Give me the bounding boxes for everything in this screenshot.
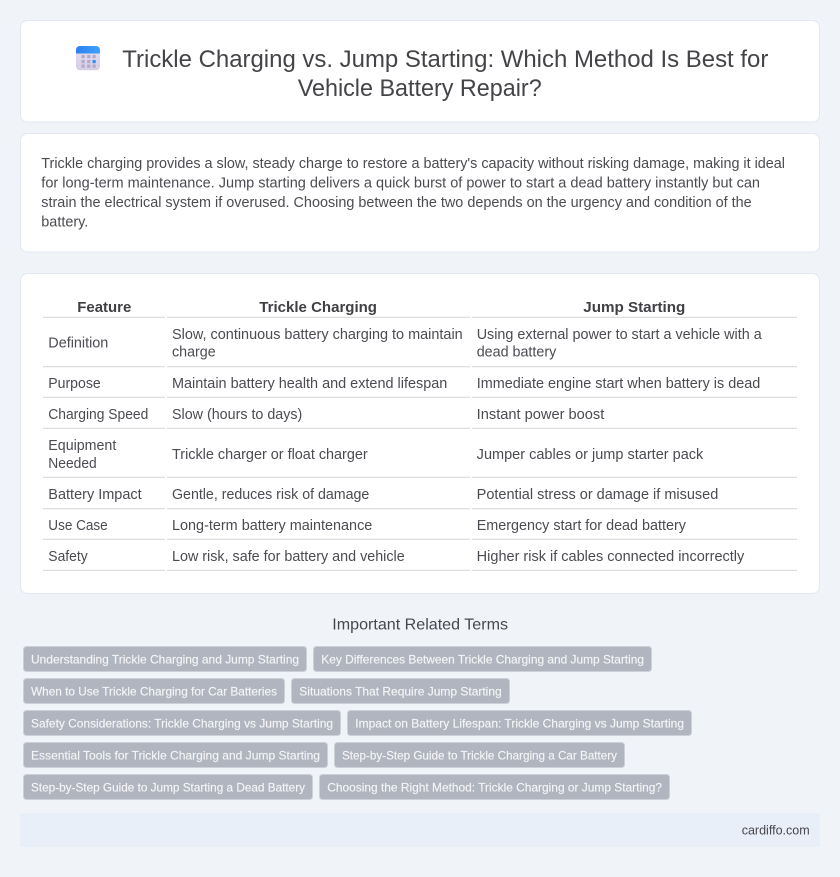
chip: Situations That Require Jump Starting [299,684,502,698]
footer: cardiffo.com [742,822,810,837]
row: equipment needed: Needed [48,456,97,472]
row: definition: dead battery [477,345,557,361]
row: battery impact [48,487,718,503]
row: safety: Low risk, safe for battery and vehicle [172,549,405,565]
row: safety: Safety [48,549,88,565]
row: use case: Emergency start for dead battery [477,518,687,534]
chip [24,774,312,800]
row: use case [48,518,687,534]
table header row: Trickle Charging [259,300,377,316]
chip: Essential Tools for Trickle Charging and Jump Starting [31,748,320,762]
row: use case: Long-term battery maintenance [172,518,372,534]
row: equipment needed [48,438,704,472]
panel: comparison table [20,274,820,594]
intro text: Trickle charging provides a slow, steady charge to restore a battery's capacity without risking damage, making it ideal [41,156,785,172]
row: safety [48,549,745,565]
row: definition [48,327,762,361]
chip [314,646,652,672]
heading: important related terms: Important Related Terms [332,616,508,633]
row: safety: Higher risk if cables connected incorrectly [477,549,745,565]
row: purpose: Immediate engine start when battery is dead [477,376,760,392]
intro text: battery. [41,215,88,231]
chip: Key Differences Between Trickle Charging and Jump Starting [321,652,644,666]
chip: Safety Considerations: Trickle Charging vs Jump Starting [31,716,333,730]
row: purpose: Purpose [48,376,101,392]
intro text: strain the electrical system if overused. Choosing between the two depends on the urgency and condition of the [41,195,752,211]
table header row [77,300,685,316]
panel: header [20,20,820,122]
chip: Step-by-Step Guide to Jump Starting a Dead Battery [31,780,305,794]
row: charging speed: Slow (hours to days) [172,407,302,423]
panel: intro paragraph [20,134,820,252]
row: definition: charge [172,345,216,361]
row: battery impact: Battery Impact [48,487,142,503]
chip: When to Use Trickle Charging for Car Batteries [31,684,277,698]
row: battery impact: Potential stress or damage if misused [477,487,718,503]
intro text: for long-term maintenance. Jump starting delivers a quick burst of power to start a dead battery instantly but can [41,176,760,192]
chip: Understanding Trickle Charging and Jump Starting [31,652,299,666]
footer [20,813,820,847]
row: purpose: Maintain battery health and extend lifespan [172,376,447,392]
row: battery impact: Gentle, reduces risk of damage [172,487,369,503]
icon: calendar [76,46,100,70]
title [122,46,768,102]
chip [24,678,284,704]
chip: Impact on Battery Lifespan: Trickle Charging vs Jump Starting [355,716,684,730]
related term chips [24,646,692,800]
row: purpose [48,376,760,392]
row: use case: Use Case [48,518,108,534]
table header row: Feature [77,300,131,316]
row: charging speed: Charging Speed [48,407,148,423]
title: Vehicle Battery Repair? [298,75,542,102]
row: definition: Slow, continuous battery charging to maintain [172,327,463,343]
row: charging speed: Instant power boost [477,407,604,423]
chip [348,710,692,736]
row: charging speed [48,407,604,423]
chip [24,646,306,672]
table header row: Jump Starting [583,300,685,316]
row: equipment needed: Trickle charger or float charger [172,447,368,463]
chip [24,710,340,736]
row: definition: Using external power to start a vehicle with a [477,327,762,343]
chip: Choosing the Right Method: Trickle Charging or Jump Starting? [327,780,662,794]
row: equipment needed: Equipment [48,438,116,454]
intro text [41,156,785,231]
chip: Step-by-Step Guide to Trickle Charging a Car Battery [342,748,617,762]
chip [292,678,510,704]
title: Trickle Charging vs. Jump Starting: Which Method Is Best for [122,46,768,73]
chip [334,742,624,768]
row: equipment needed: Jumper cables or jump starter pack [477,447,704,463]
chip [24,742,328,768]
chip [320,774,670,800]
row: definition: Definition [48,336,108,352]
